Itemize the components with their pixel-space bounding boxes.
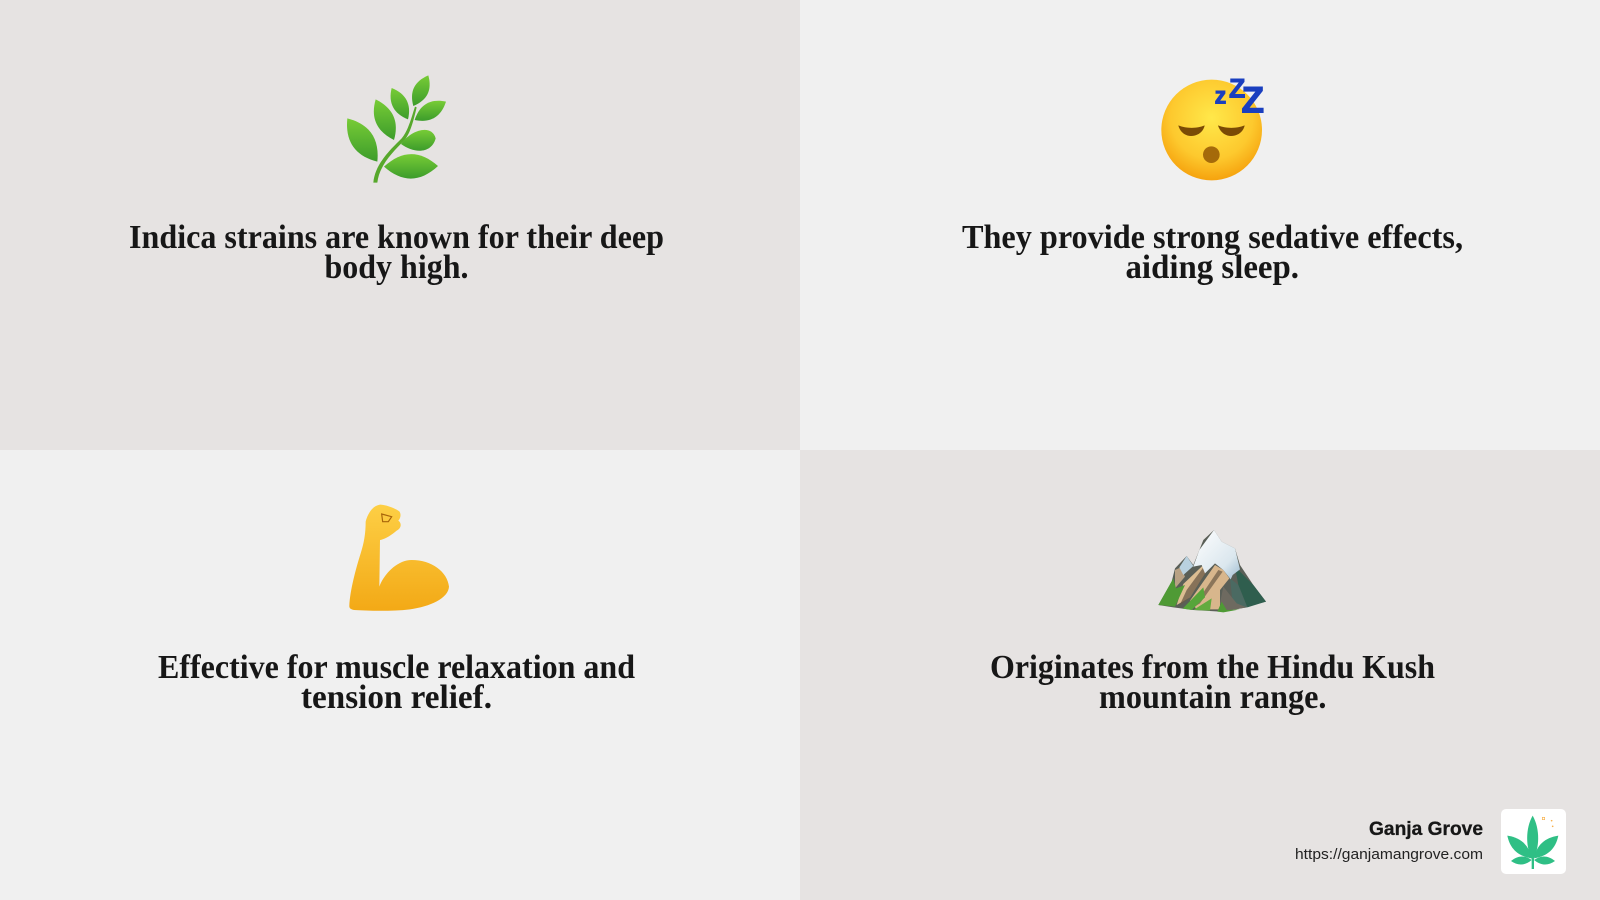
panel: origin: [800, 450, 1600, 900]
icon: herb sprig: [347, 75, 446, 183]
heading: origin: mountain range.: [1099, 679, 1326, 716]
panel: muscle relaxation: [0, 450, 800, 900]
icon: flexed biceps: [349, 505, 449, 611]
brand url: https://ganjamangrove.com: [1295, 846, 1483, 863]
heading: sedative effects: aiding sleep.: [1126, 249, 1299, 286]
panel: sedative effects: [800, 0, 1600, 450]
heading: body high: [129, 219, 664, 286]
heading: sedative effects: [962, 219, 1463, 286]
heading: sedative effects: They provide strong sedative effects,: [962, 219, 1463, 256]
icon: mountain: [1158, 530, 1266, 612]
brand name: Ganja Grove: [1369, 819, 1483, 840]
icon: sleeping face: Z: [1241, 78, 1264, 120]
icon: sleeping face: [1161, 73, 1264, 180]
panel: indica body high: [0, 0, 800, 450]
icon: sleeping face: z: [1215, 82, 1226, 108]
heading: muscle relaxation: [158, 649, 635, 716]
heading: origin: Originates from the Hindu Kush: [990, 649, 1435, 686]
brand: Ganja Grove: [1295, 809, 1566, 874]
icon: logo: [1501, 809, 1566, 874]
heading: muscle relaxation: tension relief.: [301, 679, 492, 716]
icon: sleeping face: Z: [1229, 73, 1245, 103]
heading: origin: [990, 649, 1435, 716]
heading: body high: Indica strains are known for their deep: [129, 219, 664, 256]
heading: body high: body high.: [324, 249, 468, 286]
heading: muscle relaxation: Effective for muscle relaxation and: [158, 649, 635, 686]
